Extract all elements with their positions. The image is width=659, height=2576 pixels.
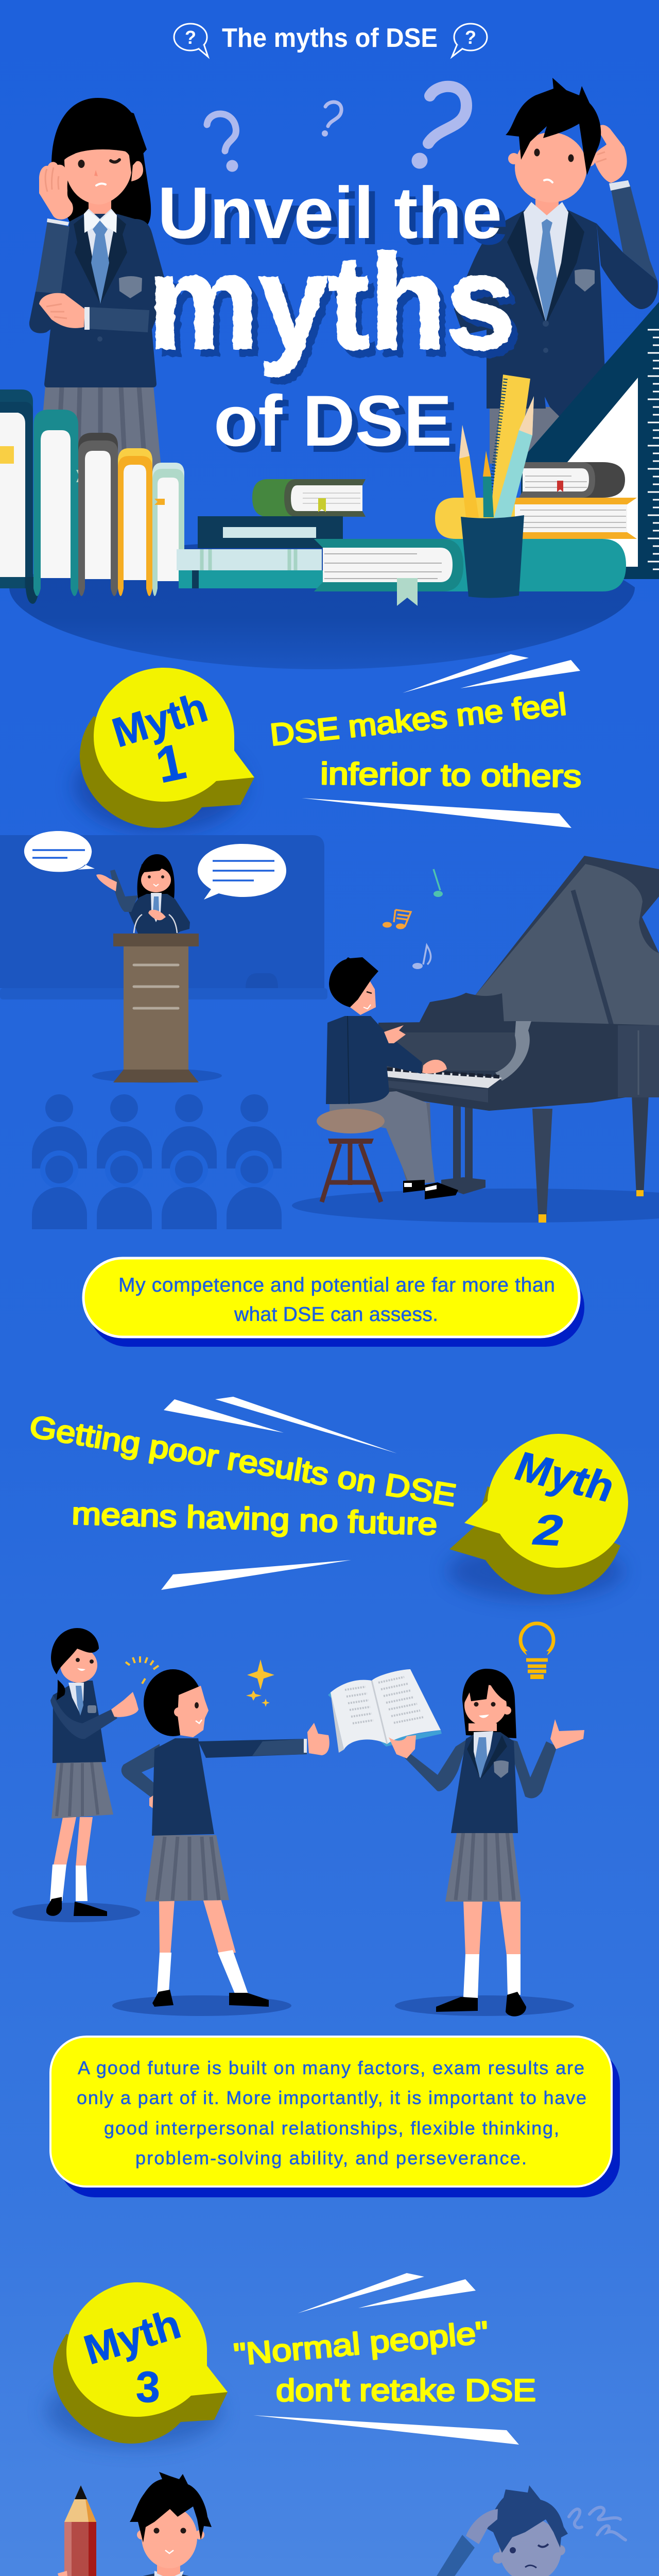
callout: myth 2 conclusion: problem-solving ability, and perseverance.: [135, 2147, 527, 2168]
title line: Unveil the: Unveil the: [158, 172, 502, 254]
thumb up hand: [307, 1723, 330, 1755]
bubble shadow: [46, 2375, 221, 2447]
speech bubbles: [24, 831, 286, 900]
ruler: [492, 375, 530, 517]
stool: [328, 1139, 374, 1144]
hands: [389, 1719, 584, 1758]
myth number: 1: [151, 733, 190, 794]
book stack middle: [177, 479, 626, 606]
callout: myth 1 conclusion: [83, 1258, 584, 1347]
main title: [148, 172, 515, 461]
raised hand: [39, 162, 73, 219]
jacket: [44, 214, 167, 387]
hair back: [144, 1669, 202, 1736]
case inner: [378, 1032, 516, 1071]
character: boy with pencil: [58, 2472, 238, 2576]
neck: [535, 191, 559, 219]
character: confused boy faded: [424, 2485, 640, 2576]
back leg: [632, 1095, 649, 1196]
trousers: [490, 407, 563, 464]
jacket: [454, 210, 605, 418]
rim: [495, 1021, 531, 1081]
shoes: [152, 1990, 269, 2007]
speech bubble: myth 1: [80, 668, 254, 828]
face: [178, 1686, 209, 1737]
hair: [329, 957, 378, 1007]
header: the myths of DSE: [174, 23, 487, 57]
character: boy thinking: [454, 78, 658, 464]
hand: [466, 2509, 498, 2544]
character: boy at piano: [317, 957, 458, 1202]
big teal book: [314, 539, 626, 591]
myth label: Myth: [107, 684, 213, 756]
myth 1 heading group: [75, 654, 582, 832]
skirt: [36, 386, 164, 495]
icon: set square ruler: [521, 302, 659, 579]
shadow: [12, 1903, 140, 1922]
lectern shadow: [92, 1069, 222, 1083]
icon: question bubble left: [174, 24, 208, 57]
hair: [484, 2485, 568, 2553]
green book: [252, 479, 366, 517]
speech bubble: myth 2: [449, 1434, 628, 1595]
title line: myths: myths: [148, 228, 515, 378]
raised arm: [597, 224, 658, 309]
shards: [161, 1397, 397, 1590]
icons: music notes: [383, 869, 443, 969]
eyes and mouth: [510, 2547, 516, 2553]
front leg: [532, 1109, 552, 1222]
jacket: [451, 1732, 518, 1833]
jacket: [129, 894, 190, 934]
badge: [119, 276, 142, 298]
body: [378, 1021, 659, 1111]
shirt and tie: [84, 209, 117, 301]
eyes and mouth: [534, 148, 540, 157]
lectern: [124, 946, 188, 1070]
floor ellipse: [9, 540, 635, 669]
buttons: [543, 320, 549, 327]
face: [141, 868, 171, 892]
arm: [371, 1019, 422, 1074]
grey book: [519, 462, 625, 498]
back arm: [122, 1744, 160, 1799]
keyboard: [377, 1066, 502, 1088]
rods and pedal: [453, 1104, 473, 1180]
shirt and tie: [474, 1731, 493, 1777]
audience silhouettes: [32, 1094, 282, 1229]
hair: [137, 854, 175, 899]
panel: stage backdrop: [0, 835, 327, 999]
heading text line 1: "Normal people": [232, 2315, 490, 2372]
jacket: [152, 1738, 214, 1836]
hands: [111, 1692, 138, 1717]
title line: of DSE: of DSE: [214, 380, 452, 461]
hair: [130, 2472, 212, 2543]
bubble shadow: [75, 739, 245, 832]
character: speaker at lectern: [92, 854, 222, 1083]
callout: myth 1 conclusion: My competence and potential are far more than: [118, 1274, 555, 1296]
shirt and tie: [68, 1683, 84, 1713]
button: [97, 336, 102, 342]
icon: light bulb: [521, 1623, 553, 1679]
skirt: [145, 1835, 229, 1902]
heading text line 1: Getting poor results on DSE: [27, 1409, 459, 1513]
ear: [131, 161, 143, 181]
myth label: Myth: [79, 2301, 186, 2373]
jacket: [326, 1016, 389, 1104]
illustration: large pencil: [64, 2485, 96, 2576]
fingers on pencil: [58, 2571, 70, 2576]
icon: question bubble right: [452, 24, 487, 57]
legs: [463, 1901, 521, 1955]
myth 2 heading group: [27, 1397, 628, 1600]
clapping sparks: [126, 1656, 159, 1684]
shadow: [112, 1995, 291, 2016]
hands: [96, 874, 117, 891]
jacket: [130, 2573, 216, 2576]
hair back: [462, 1669, 516, 1738]
lapels: [467, 1735, 507, 1780]
heading text line 2: means having no future: [72, 1496, 438, 1541]
music desk: [416, 993, 505, 1030]
hair: [506, 78, 601, 175]
forearm: [88, 307, 149, 332]
eyes and mouth: [474, 1702, 479, 1706]
book stack right: [435, 375, 637, 598]
face: [64, 149, 131, 205]
shadow: [292, 1189, 659, 1223]
character: girl thumbs up: [112, 1669, 330, 2016]
illustration: grand piano: [292, 856, 659, 1223]
book 2: [33, 410, 78, 596]
yellow book: [435, 498, 637, 539]
folded hand: [39, 293, 85, 328]
lid prop: [573, 890, 612, 1026]
hair ponytail: [57, 1680, 65, 1700]
teal pencil: [483, 451, 494, 517]
yellow pencil: [459, 425, 479, 517]
eyes and mouth: [78, 160, 84, 168]
hand on hip: [149, 1794, 168, 1809]
skirt: [51, 1760, 113, 1819]
shirt and tie: [524, 202, 568, 322]
myth number: 2: [528, 1505, 569, 1555]
book 5: [152, 463, 184, 596]
lapels: [507, 211, 584, 325]
book 1: [0, 389, 33, 588]
shards: [302, 654, 580, 828]
face: [142, 2506, 197, 2568]
left sleeve: [36, 222, 70, 294]
icon: question bubble right: ?: [465, 27, 476, 48]
myth number: 3: [136, 2363, 160, 2411]
far leg: [384, 1103, 432, 1182]
bangs: [464, 1672, 510, 1703]
badge: [494, 1760, 509, 1778]
teal book: [179, 570, 324, 588]
legs: [159, 1899, 236, 1955]
lapels: [74, 215, 127, 304]
illustration: open book: [328, 1669, 442, 1753]
callout: myth 2 conclusion: [50, 2037, 620, 2197]
heading text line 2: inferior to others: [320, 756, 582, 793]
shards: [253, 2273, 519, 2445]
book 4: [118, 448, 152, 596]
header text: The myths of DSE: [222, 23, 438, 53]
sleeve: [50, 1695, 117, 1739]
face: [60, 1648, 97, 1683]
arms: [404, 1738, 469, 1791]
bubble shadow: [448, 1543, 623, 1600]
dark book: [198, 516, 343, 548]
character: girl with book: [389, 1669, 584, 2016]
shirt and tie: [151, 893, 162, 922]
heading text line 2: don't retake DSE: [276, 2373, 536, 2408]
hands: [384, 1025, 447, 1074]
bangs: [62, 103, 147, 166]
myth 3 heading group: [46, 2273, 536, 2447]
badge: [575, 269, 595, 292]
callout: myth 2 conclusion: A good future is built on many factors, exam results are: [78, 2057, 584, 2078]
cup: [461, 515, 524, 598]
squiggles: [569, 2507, 626, 2540]
pale pencil: [494, 396, 534, 518]
callout: myth 2 conclusion: good interpersonal relationships, flexible thinking,: [104, 2117, 559, 2139]
myth label: Myth: [508, 1444, 621, 1511]
shoes: [46, 1897, 107, 1916]
shadow: [395, 1995, 574, 2016]
pale book: [177, 549, 322, 570]
hair back: [51, 98, 151, 227]
skirt: [445, 1831, 521, 1902]
shirt and tie: [153, 2571, 184, 2576]
character: girl clapping: [12, 1628, 140, 1922]
hand: [594, 125, 627, 183]
face: [464, 1685, 507, 1726]
hair: [51, 1628, 99, 1674]
badge: [88, 1705, 96, 1713]
book 3: [78, 433, 118, 596]
lid: [475, 856, 659, 1030]
eyes and mouth: [153, 2528, 160, 2534]
character: girl thinking: [29, 98, 167, 495]
callout: myth 2 conclusion: only a part of it. More importantly, it is important to have: [77, 2087, 586, 2108]
callout: myth 1 conclusion: what DSE can assess.: [234, 1303, 438, 1326]
legs: [54, 1817, 93, 1866]
neck: [89, 198, 111, 223]
arm: [198, 1739, 307, 1758]
microphones: [134, 914, 177, 933]
shoes: [436, 1992, 526, 2016]
jacket: [53, 1681, 106, 1763]
speech bubble: myth 3: [53, 2282, 228, 2444]
neck: [157, 2558, 180, 2576]
icon: sparkles: [246, 1659, 274, 1707]
book stack left: [0, 389, 184, 604]
face: [350, 976, 376, 1015]
icon: question bubble left: ?: [185, 27, 196, 48]
heading text line 1: DSE makes me feel: [268, 687, 568, 752]
question marks: [207, 87, 466, 172]
arm: [424, 2535, 492, 2576]
trousers: [330, 1091, 435, 1184]
shoes: [403, 1180, 458, 1199]
face: [515, 132, 587, 202]
